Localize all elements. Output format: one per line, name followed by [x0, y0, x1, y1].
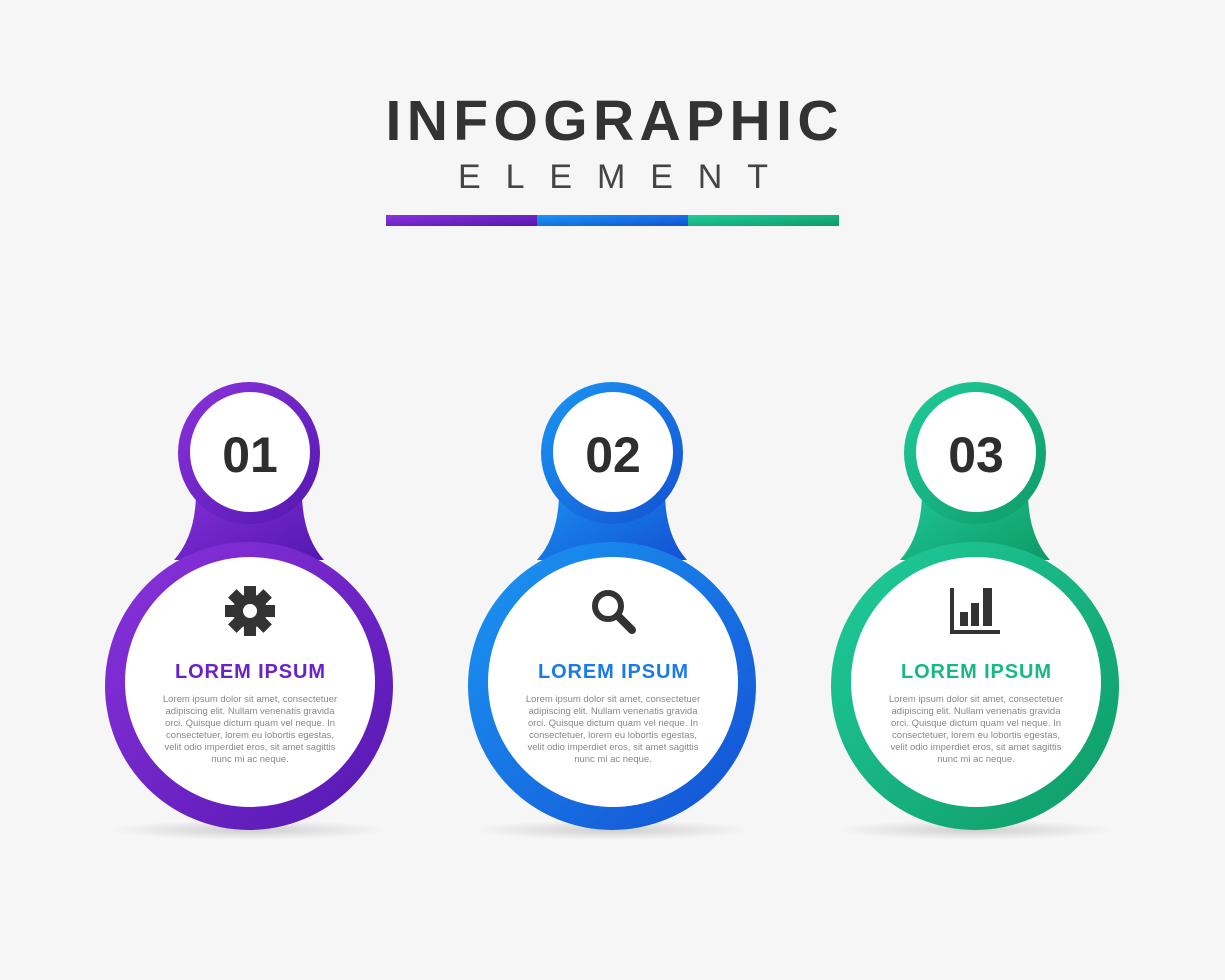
title: INFOGRAPHIC: [386, 89, 838, 153]
number 03: 03: [948, 427, 1004, 483]
body text: velit odio imperdiet eros, sit amet sagittis: [527, 742, 699, 753]
heading: LOREM IPSUM: [538, 661, 688, 683]
body text: Lorem ipsum dolor sit amet, consectetuer: [526, 694, 700, 705]
body text: orci. Quisque dictum quam vel neque. In: [891, 718, 1061, 729]
body text: [889, 694, 1063, 765]
icon: magnifier: [595, 593, 632, 630]
body text: Lorem ipsum dolor sit amet, consectetuer: [889, 694, 1063, 705]
body text: orci. Quisque dictum quam vel neque. In: [528, 718, 698, 729]
icon: bar chart: [950, 588, 1000, 634]
icon: gear: [225, 586, 275, 636]
body text: velit odio imperdiet eros, sit amet sagittis: [890, 742, 1062, 753]
body text: adipiscing elit. Nullam venenatis gravida: [529, 706, 698, 717]
body text: orci. Quisque dictum quam vel neque. In: [165, 718, 335, 729]
panel: step 01: [105, 382, 393, 840]
panel: step 02: [468, 382, 756, 840]
body text: adipiscing elit. Nullam venenatis gravida: [166, 706, 335, 717]
body text: Lorem ipsum dolor sit amet, consectetuer: [163, 694, 337, 705]
body text: adipiscing elit. Nullam venenatis gravida: [892, 706, 1061, 717]
body text: nunc mi ac neque.: [574, 754, 652, 765]
heading: LOREM IPSUM: [175, 661, 325, 683]
body text: nunc mi ac neque.: [937, 754, 1015, 765]
subtitle: ELEMENT: [458, 158, 768, 196]
body text: consectetuer, lorem eu lobortis egestas,: [166, 730, 334, 741]
body text: consectetuer, lorem eu lobortis egestas,: [892, 730, 1060, 741]
body text: [163, 694, 337, 765]
number 01: 01: [222, 427, 278, 483]
panel: step 03: [831, 382, 1119, 840]
body text: velit odio imperdiet eros, sit amet sagittis: [164, 742, 336, 753]
heading: LOREM IPSUM: [901, 661, 1051, 683]
body text: nunc mi ac neque.: [211, 754, 289, 765]
number 02: 02: [585, 427, 641, 483]
body text: consectetuer, lorem eu lobortis egestas,: [529, 730, 697, 741]
title underline bar: [386, 215, 839, 226]
body text: [526, 694, 700, 765]
